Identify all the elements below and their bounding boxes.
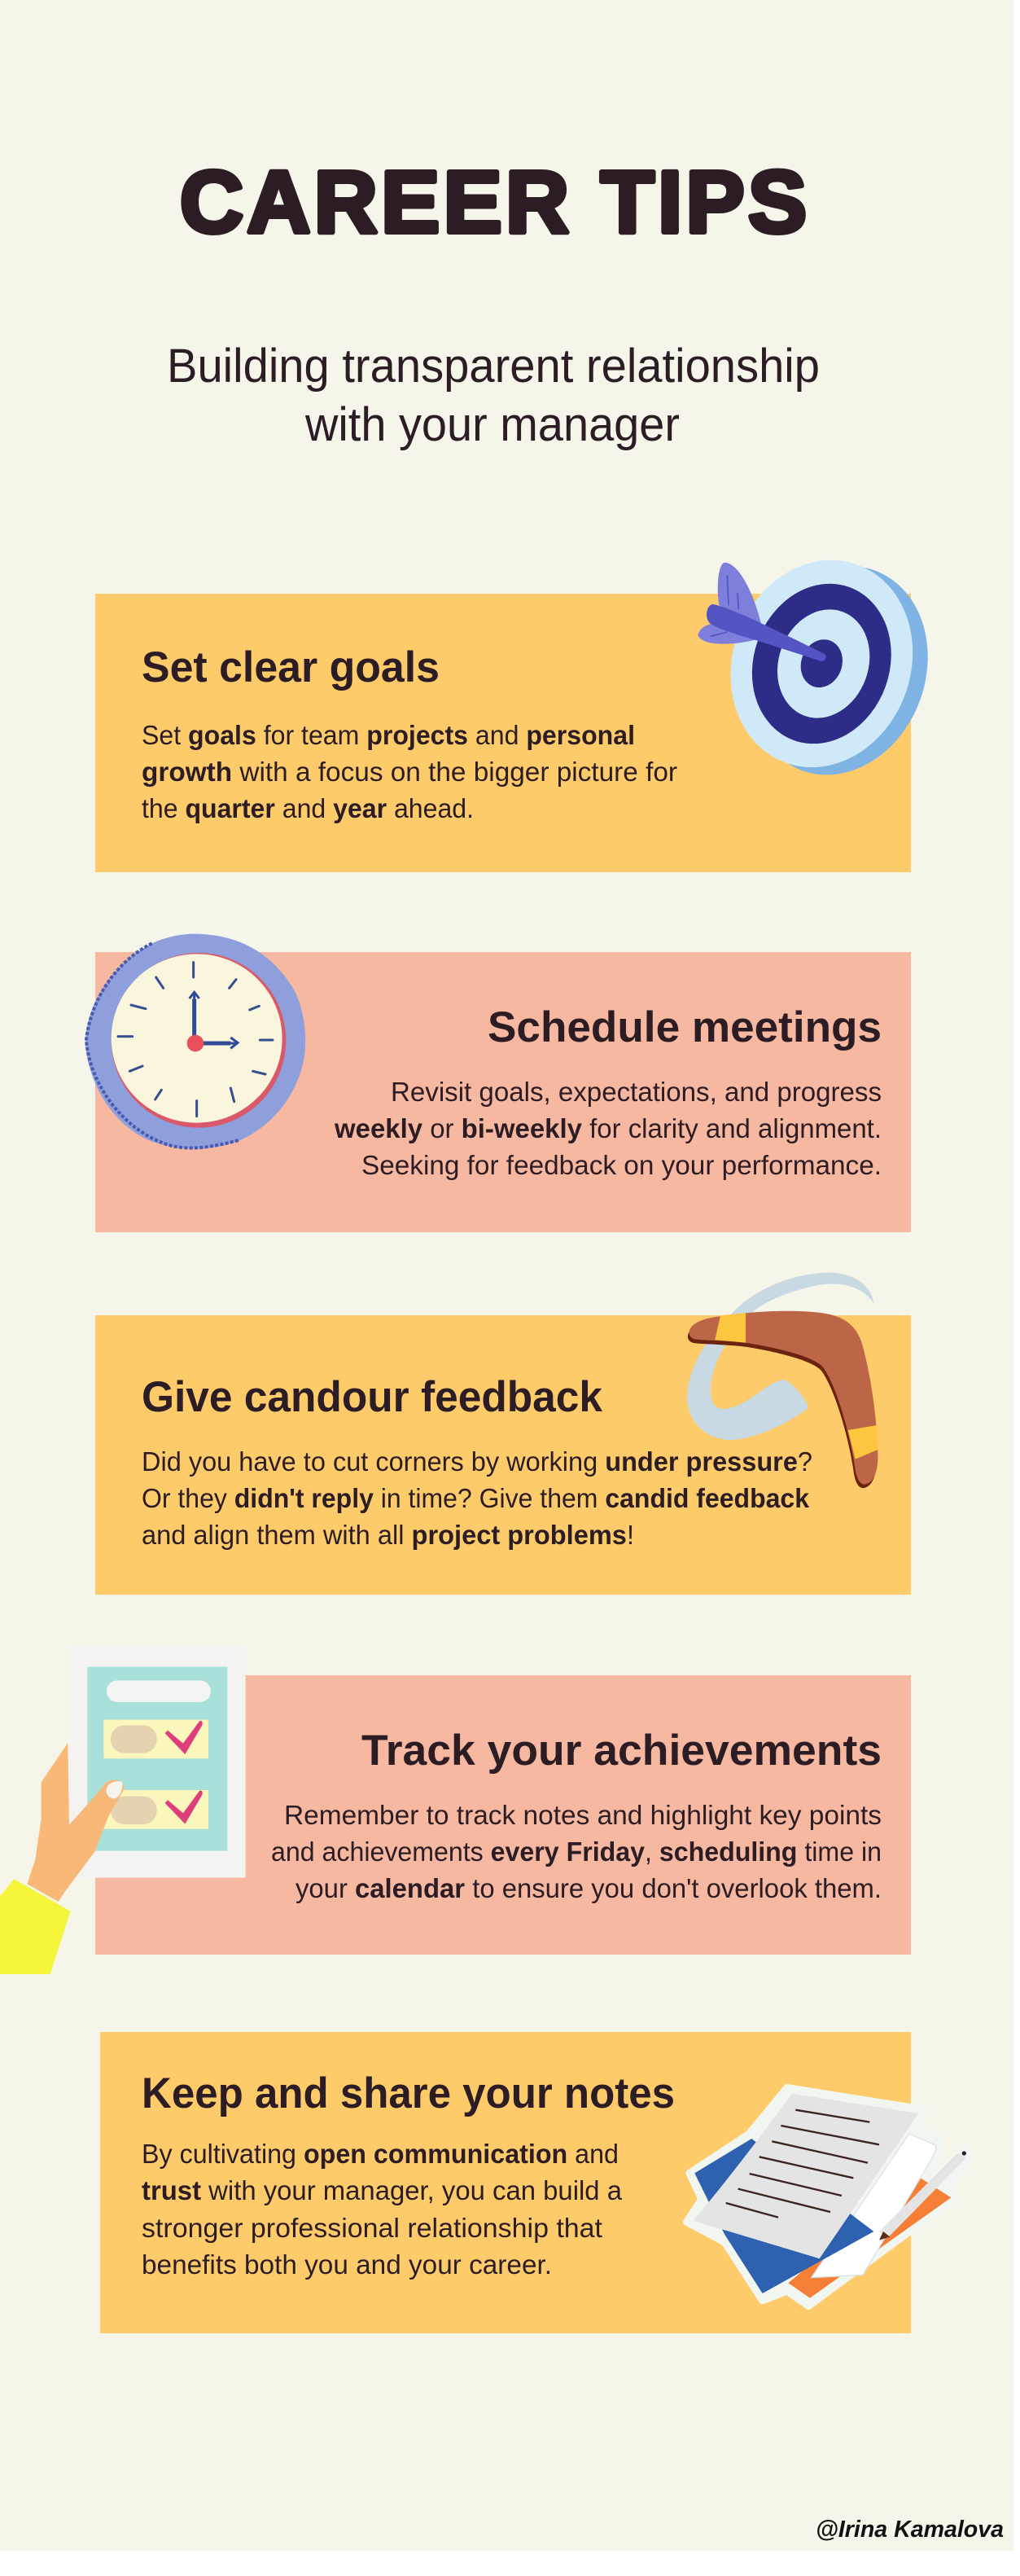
body text: set clear goals: growth with a focus on the bigger picture for — [142, 757, 677, 787]
body text: give candour feedback: Or they didn't reply in time? Give them candid feedback — [142, 1483, 810, 1513]
subtitle: Building transparent relationship — [167, 340, 820, 393]
body text: keep and share your notes: benefits both you and your career. — [142, 2249, 552, 2280]
panel: keep and share your notes — [100, 2032, 911, 2333]
icon: boomerang — [687, 1273, 878, 1488]
body text: track your achievements: Remember to track notes and highlight key points — [284, 1800, 882, 1830]
body text: set clear goals: the quarter and year ahead. — [142, 793, 474, 823]
body text: keep and share your notes: By cultivating open communication and — [142, 2139, 619, 2169]
body text: keep and share your notes: trust with your manager, you can build a — [142, 2175, 623, 2205]
body text: track your achievements: your calendar to ensure you don't overlook them. — [295, 1873, 882, 1903]
body text: track your achievements: and achievements every Friday, scheduling time in — [271, 1837, 882, 1867]
heading: set clear goals: Set clear goals — [142, 643, 440, 691]
subtitle: with your manager — [304, 398, 680, 451]
body text: track your achievements — [271, 1800, 882, 1903]
heading: track your achievements: Track your achievements — [361, 1727, 882, 1775]
heading: keep and share your notes: Keep and share your notes — [142, 2069, 675, 2117]
body text: give candour feedback: Did you have to cut corners by working under pressure? — [142, 1446, 812, 1477]
body text: give candour feedback: and align them with all project problems! — [142, 1520, 634, 1550]
body text: keep and share your notes: stronger professional relationship that — [142, 2213, 602, 2243]
body text: schedule meetings — [334, 1077, 882, 1180]
body text: set clear goals: Set goals for team projects and personal — [142, 720, 635, 750]
body text: schedule meetings: Revisit goals, expectations, and progress — [391, 1077, 882, 1107]
icon: clock — [85, 934, 305, 1149]
panel: track your achievements — [95, 1675, 911, 1955]
body text: keep and share your notes — [142, 2139, 623, 2280]
icon: target with dart — [698, 534, 957, 801]
icon: hand holding checklist — [0, 1647, 246, 1974]
title: CAREER TIPS — [180, 152, 807, 251]
footer credit: @Irina Kamalova — [816, 2517, 1004, 2543]
body text: give candour feedback — [142, 1446, 812, 1550]
panel: give candour feedback — [95, 1315, 911, 1595]
panel: schedule meetings — [95, 952, 911, 1232]
icon: notes and pencil — [686, 2087, 974, 2306]
panel: set clear goals — [95, 594, 911, 872]
heading: give candour feedback: Give candour feedback — [142, 1373, 602, 1421]
body text: set clear goals — [142, 720, 677, 823]
body text: schedule meetings: weekly or bi-weekly for clarity and alignment. — [334, 1113, 882, 1143]
subtitle — [167, 340, 820, 451]
heading: schedule meetings: Schedule meetings — [488, 1003, 882, 1051]
body text: schedule meetings: Seeking for feedback on your performance. — [361, 1150, 882, 1180]
